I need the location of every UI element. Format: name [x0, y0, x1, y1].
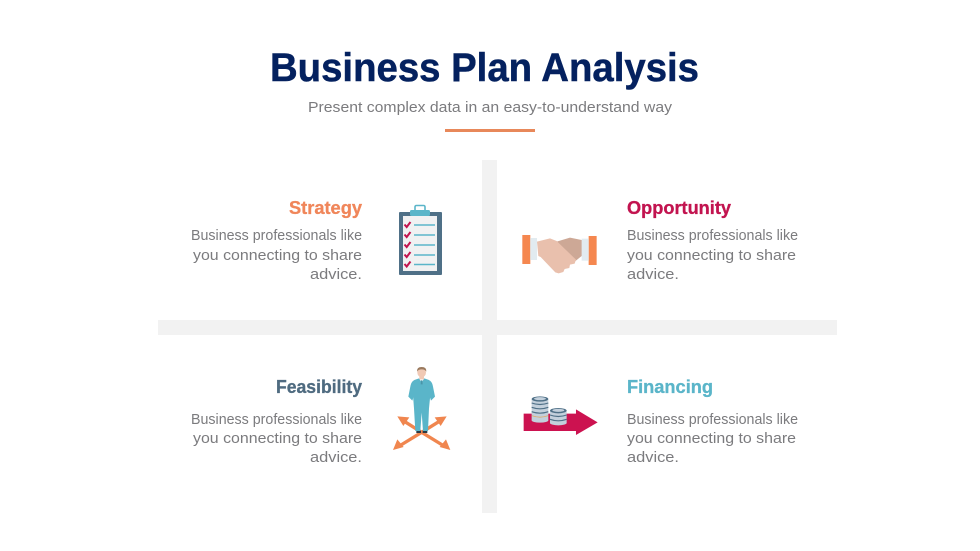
text: financing description: advice.	[627, 450, 679, 466]
icon: handshake	[522, 235, 597, 273]
panel: feasibility	[191, 367, 450, 466]
icon: person at crossroads with four arrows	[393, 367, 450, 450]
text: feasibility description: advice.	[310, 450, 362, 466]
text: feasibility description: you connecting to share	[193, 431, 362, 447]
panel: opportunity	[522, 198, 798, 283]
text: strategy description: you connecting to share	[193, 248, 362, 264]
icon: clipboard checklist	[399, 206, 442, 275]
text: opportunity description	[627, 228, 798, 283]
panel: strategy	[191, 198, 442, 283]
text: opportunity description: Business professionals like	[627, 228, 798, 244]
title accent rule	[445, 129, 535, 132]
text: opportunity description: advice.	[627, 267, 679, 283]
text: financing description: you connecting to share	[627, 431, 796, 447]
icon: coin stacks on red arrow	[524, 396, 598, 435]
heading: financing: Financing	[627, 377, 713, 397]
text: feasibility description: Business professionals like	[191, 412, 362, 428]
text: strategy description: Business professionals like	[191, 228, 362, 244]
cross-shaped quadrant divider	[158, 160, 837, 513]
text: strategy description	[191, 228, 362, 283]
text: opportunity description: you connecting to share	[627, 248, 796, 264]
subtitle: Present complex data in an easy-to-understand way	[308, 99, 673, 116]
text: financing description	[627, 412, 798, 466]
text: strategy description: advice.	[310, 267, 362, 283]
heading: strategy: Strategy	[289, 198, 362, 218]
heading: feasibility: Feasibility	[276, 377, 362, 397]
title: Business Plan Analysis	[270, 46, 699, 90]
panel: financing	[524, 377, 798, 466]
text: feasibility description	[191, 412, 362, 466]
heading: opportunity: Opportunity	[627, 198, 731, 218]
text: financing description: Business professionals like	[627, 412, 798, 428]
